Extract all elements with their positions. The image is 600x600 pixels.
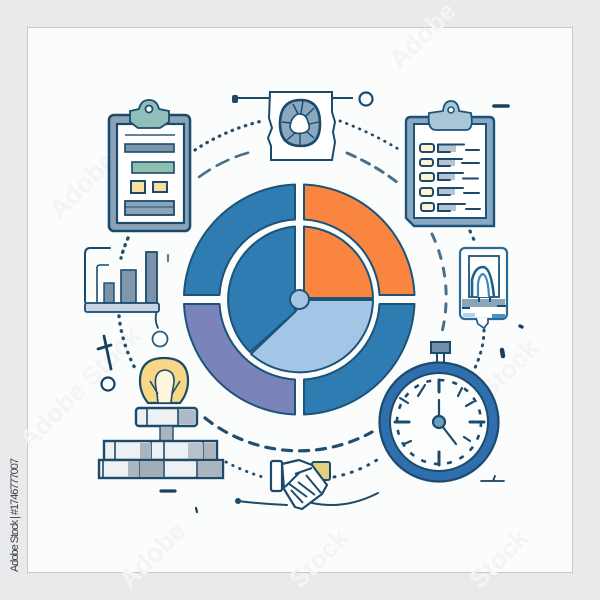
outer ring: blue top-left xyxy=(184,184,295,295)
device icon right xyxy=(460,248,507,328)
outer ring: blue bottom-right xyxy=(304,304,414,414)
hub xyxy=(290,290,309,309)
inner slice: orange xyxy=(304,226,373,298)
watermarks: Adobe xyxy=(113,516,191,594)
stock id sidebar text: Adobe Stock | #1746777007 xyxy=(9,458,21,572)
outer ring: purple bottom-left xyxy=(184,304,295,414)
top emblem card xyxy=(232,92,372,160)
watermarks: Stock xyxy=(463,523,535,594)
bricks middle xyxy=(104,441,217,460)
stopwatch xyxy=(380,342,498,482)
clipboard left xyxy=(109,100,190,231)
emblem xyxy=(280,100,320,146)
connector: dotted and dashed arcs xyxy=(119,121,484,478)
checklist rows xyxy=(420,144,434,211)
outer ring: orange top-right xyxy=(304,184,414,295)
handshake xyxy=(235,460,378,509)
light bulb on bricks xyxy=(99,358,223,478)
clipboard right xyxy=(406,101,494,226)
bricks bottom xyxy=(99,460,223,478)
bricks top xyxy=(136,408,197,426)
watermarks: Stock xyxy=(473,333,545,404)
small decorations xyxy=(98,106,522,512)
bar chart xyxy=(85,248,159,312)
inner slice: light blue xyxy=(251,300,373,372)
clip xyxy=(130,100,169,128)
watermarks: Adobe Stock xyxy=(13,320,147,454)
clip xyxy=(429,101,472,130)
inner slice: blue xyxy=(228,226,295,352)
watermarks: Adobe xyxy=(43,146,121,224)
central pie chart xyxy=(184,184,414,414)
watermarks: Stock xyxy=(283,523,355,594)
